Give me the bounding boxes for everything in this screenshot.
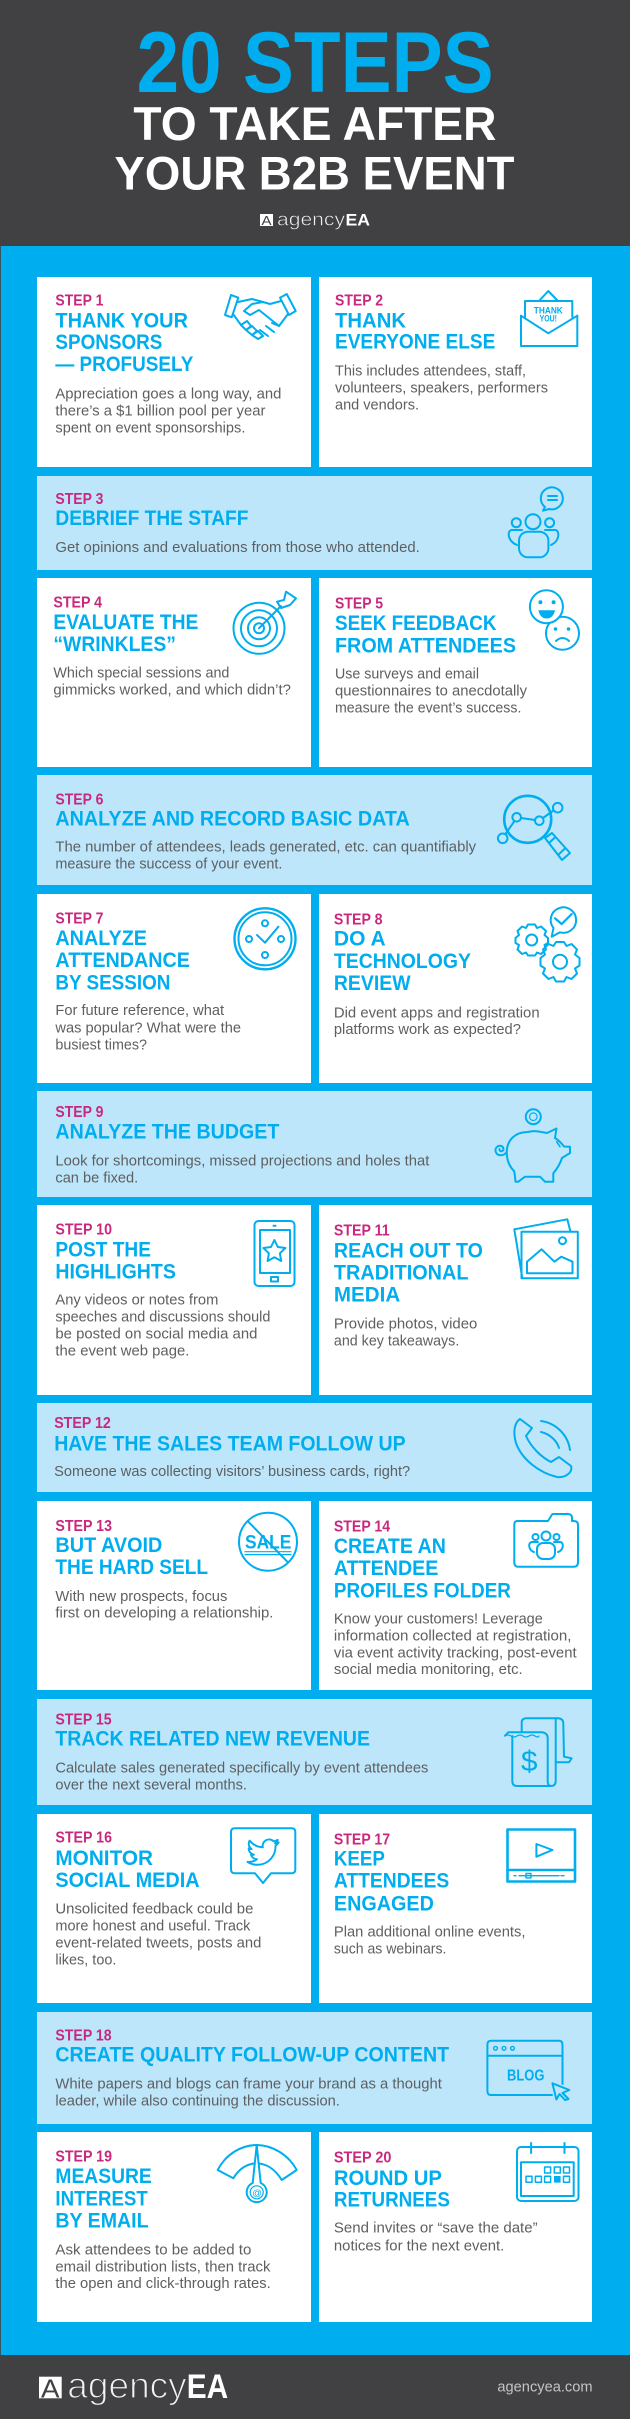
body text [55,1902,261,1968]
icon: thank you envelope: THANK [534,305,563,315]
icon: blog browser window: BLOG [507,2068,544,2085]
heading: RETURNEES [334,2189,450,2212]
heading [55,927,190,994]
step label: STEP 4 [53,595,102,612]
footer logo [39,2365,228,2406]
heading [334,928,471,995]
body text [334,1924,526,1957]
body text: Get opinions and evaluations from those who attended. [55,540,420,556]
icon: video player [508,1830,575,1882]
icon: handshake [225,294,296,339]
body text: and vendors. [335,397,419,413]
icon: no sale sign [239,1513,297,1571]
title: to take after: TO TAKE AFTER [133,97,496,150]
body text: questionnaires to anecdotally [335,684,528,700]
heading [334,2167,450,2212]
body text: information collected at registration, [334,1628,571,1644]
heading: THANK YOUR [55,309,188,332]
step label: STEP 15 [55,1711,112,1728]
heading: MONITOR [55,1847,153,1870]
step label: STEP 11 [334,1222,390,1239]
body text: gimmicks worked, and which didn’t? [53,682,291,698]
heading: HIGHLIGHTS [55,1260,176,1283]
footer band [0,2355,630,2419]
step label: STEP 10 [55,1221,112,1238]
icon: blog browser window [487,2041,569,2100]
header band [0,0,630,246]
heading: HAVE THE SALES TEAM FOLLOW UP [54,1433,406,1456]
step label: STEP 19 [55,2149,112,2166]
body text: and key takeaways. [334,1333,459,1349]
step label: STEP 18 [55,2027,112,2044]
panel: step 9 [37,1091,592,1197]
icon: happy and sad faces [530,590,579,650]
heading: EVALUATE THE [53,611,198,634]
icon: smartphone with star [254,1221,294,1286]
panel: step 12 [37,1403,592,1492]
body text: Any videos or notes from [55,1293,218,1309]
body text: Use surveys and email [335,667,479,683]
icon: clock [234,908,296,969]
heading: TRADITIONAL [334,1261,469,1284]
icon: bird in speech bubble [231,1828,295,1883]
heading: MEDIA [334,1283,400,1306]
body text: This includes attendees, staff, [335,364,526,380]
body text: email distribution lists, then track [55,2259,271,2275]
body text [334,1316,477,1349]
heading: BY SESSION [55,971,170,994]
body text: more honest and useful. Track [55,1919,251,1935]
body text: event-related tweets, posts and [55,1935,261,1951]
heading [55,309,193,376]
heading: INTEREST [55,2188,148,2211]
body text: be posted on social media and [55,1326,257,1342]
panel: step 10 [37,1205,311,1395]
body text: measure the success of your event. [55,856,282,872]
body text [55,1153,429,1186]
heading: SPONSORS [55,331,162,354]
body text [55,386,281,436]
heading: FROM ATTENDEES [335,635,516,658]
step label: STEP 1 [55,292,103,309]
step label: STEP 8 [334,912,383,929]
body text: there’s a $1 billion pool per year [55,403,266,419]
icon: group with speech bubble [509,487,563,557]
panel: step 17 [319,1814,592,2003]
panel: step 18 [37,2012,592,2124]
panel: step 11 [319,1205,592,1395]
step label: STEP 20 [334,2150,391,2167]
body text: Someone was collecting visitors’ business cards, right? [54,1464,410,1480]
icon: thank you envelope [521,291,577,346]
body text: first on developing a relationship. [55,1606,273,1622]
step label: STEP 14 [334,1519,390,1536]
heading: ATTENDANCE [55,949,190,972]
icon: no sale sign: SALE [245,1531,291,1553]
icon: target with arrow [234,592,296,654]
body text [334,2221,538,2255]
step label: STEP 6 [55,791,103,808]
body text: was popular? What were the [54,1020,241,1036]
heading: SOCIAL MEDIA [55,1869,200,1892]
heading: REACH OUT TO [334,1240,483,1263]
body text: For future reference, what [55,1003,224,1019]
header logo: EA [346,211,370,230]
body text: likes, too. [55,1952,116,1968]
heading: DEBRIEF THE STAFF [55,507,249,530]
step label: STEP 5 [335,596,383,613]
body text: White papers and blogs can frame your brand as a thought [55,2076,442,2092]
footer logo: A [41,2374,60,2404]
panel: step 1 [37,277,311,467]
heading: CREATE QUALITY FOLLOW-UP CONTENT [55,2044,449,2067]
heading: MEASURE [55,2165,152,2188]
body text [55,839,477,872]
icon: attendee folder [514,1514,578,1567]
icon: thank you envelope: YOU! [540,314,557,324]
panel: step 2 [319,277,592,467]
heading [335,309,495,353]
heading: TECHNOLOGY [334,950,471,973]
title: 20 steps: 20 STEPS [137,15,494,111]
heading: — PROFUSELY [55,353,193,376]
heading [334,1240,483,1306]
footer logo: EA [187,2368,228,2406]
body text: Send invites or “save the date” [334,2221,538,2237]
heading [55,2165,152,2233]
icon: gauge with at sign [218,2145,297,2202]
body text: platforms work as expected? [334,1022,521,1038]
icon: receipt with dollar sign: $ [521,1746,538,1778]
heading: ANALYZE THE BUDGET [55,1120,280,1143]
body text: Calculate sales generated specifically by event attendees [55,1761,428,1777]
panel: step 13 [37,1501,311,1690]
body text: can be fixed. [55,1170,138,1186]
heading: ANALYZE AND RECORD BASIC DATA [55,807,410,830]
body text [55,1589,273,1622]
body text [55,2076,442,2109]
body text: leader, while also continuing the discussion. [55,2093,340,2109]
step label: STEP 16 [55,1830,112,1847]
heading: ROUND UP [334,2167,442,2190]
icon: magnifier over data [498,796,570,860]
heading [55,1239,176,1283]
title: your b2b event: YOUR B2B EVENT [114,146,515,200]
body text: busiest times? [55,1038,147,1054]
body text: volunteers, speakers, performers [335,381,548,397]
icon: gauge with at sign: @ [252,2188,262,2199]
body text: Provide photos, video [334,1316,477,1332]
body text: The number of attendees, leads generated, etc. can quantifiably [55,839,477,855]
panel: step 19 [37,2132,311,2322]
body text: Appreciation goes a long way, and [55,386,281,402]
body text [334,1005,540,1038]
heading: THANK [335,309,406,332]
body text: spent on event sponsorships. [55,420,245,436]
heading [334,1535,511,1602]
body text: via event activity tracking, post-event [334,1645,577,1661]
heading: BUT AVOID [55,1534,162,1557]
footer url: agencyea.com [497,2380,593,2396]
body text: over the next several months. [55,1777,247,1793]
step label: STEP 2 [335,292,383,309]
icon: phone handset [514,1419,571,1477]
heading: ATTENDEE [334,1557,438,1580]
panel: step 15 [37,1699,592,1805]
step label: STEP 7 [55,911,103,928]
body text [55,1761,428,1793]
panel: step 20 [319,2132,592,2322]
body text [335,364,548,413]
heading: BY EMAIL [55,2210,149,2233]
step label: STEP 17 [334,1831,390,1848]
panel: step 8 [319,894,592,1083]
body text: Know your customers! Leverage [334,1612,543,1628]
step label: STEP 9 [55,1104,103,1121]
body text [55,2242,271,2292]
heading: CREATE AN [334,1535,446,1558]
panel: step 5 [319,578,592,767]
step label: STEP 13 [55,1518,112,1535]
body text [54,1003,241,1054]
body text: speeches and discussions should [55,1309,270,1325]
heading: REVIEW [334,972,411,995]
body text: the open and click-through rates. [55,2276,271,2292]
header logo [260,210,370,230]
heading [55,1847,200,1892]
footer logo: agency [67,2365,187,2406]
icon: photographs [514,1219,578,1278]
icon: piggy bank [495,1109,570,1182]
heading [55,1534,208,1579]
body text: the event web page. [55,1343,189,1359]
heading: ENGAGED [334,1892,434,1915]
heading [53,611,198,656]
body text [335,667,528,716]
panel: step 4 [37,578,311,767]
heading: PROFILES FOLDER [334,1579,511,1602]
step label: STEP 12 [54,1415,111,1432]
body text [53,666,291,698]
body text [334,1612,577,1678]
body text: Ask attendees to be added to [55,2242,251,2258]
heading: POST THE [55,1239,151,1262]
panel: step 16 [37,1814,311,2003]
icon: receipt with dollar sign [505,1718,572,1786]
body text: notices for the next event. [334,2239,504,2255]
heading: ATTENDEES [334,1870,449,1893]
header logo: agency [277,210,345,230]
heading: ANALYZE [55,927,147,950]
heading [335,612,516,658]
panel: step 14 [319,1501,592,1690]
body text: Look for shortcomings, missed projections and holes that [55,1153,429,1169]
body text: Did event apps and registration [334,1005,540,1021]
body text: social media monitoring, etc. [334,1662,523,1678]
body text: Unsolicited feedback could be [55,1902,253,1918]
icon: calendar [517,2143,578,2201]
heading [334,1848,449,1915]
body text: measure the event’s success. [335,700,521,716]
panel: step 7 [37,894,311,1083]
panel: step 3 [37,476,592,570]
heading: TRACK RELATED NEW REVENUE [55,1728,370,1751]
header logo: A [262,213,272,228]
icon: gears with check bubble [516,907,580,982]
heading: THE HARD SELL [55,1556,208,1579]
heading: KEEP [334,1848,385,1871]
body text: With new prospects, focus [55,1589,227,1605]
body text: Plan additional online events, [334,1924,526,1940]
body text: Which special sessions and [53,666,229,682]
heading: “WRINKLES” [53,633,176,656]
body text: such as webinars. [334,1941,446,1957]
panel: step 6 [37,775,592,885]
heading: SEEK FEEDBACK [335,612,496,635]
heading: DO A [334,928,386,951]
heading: EVERYONE ELSE [335,330,495,353]
step label: STEP 3 [55,491,103,508]
body text [55,1293,270,1359]
